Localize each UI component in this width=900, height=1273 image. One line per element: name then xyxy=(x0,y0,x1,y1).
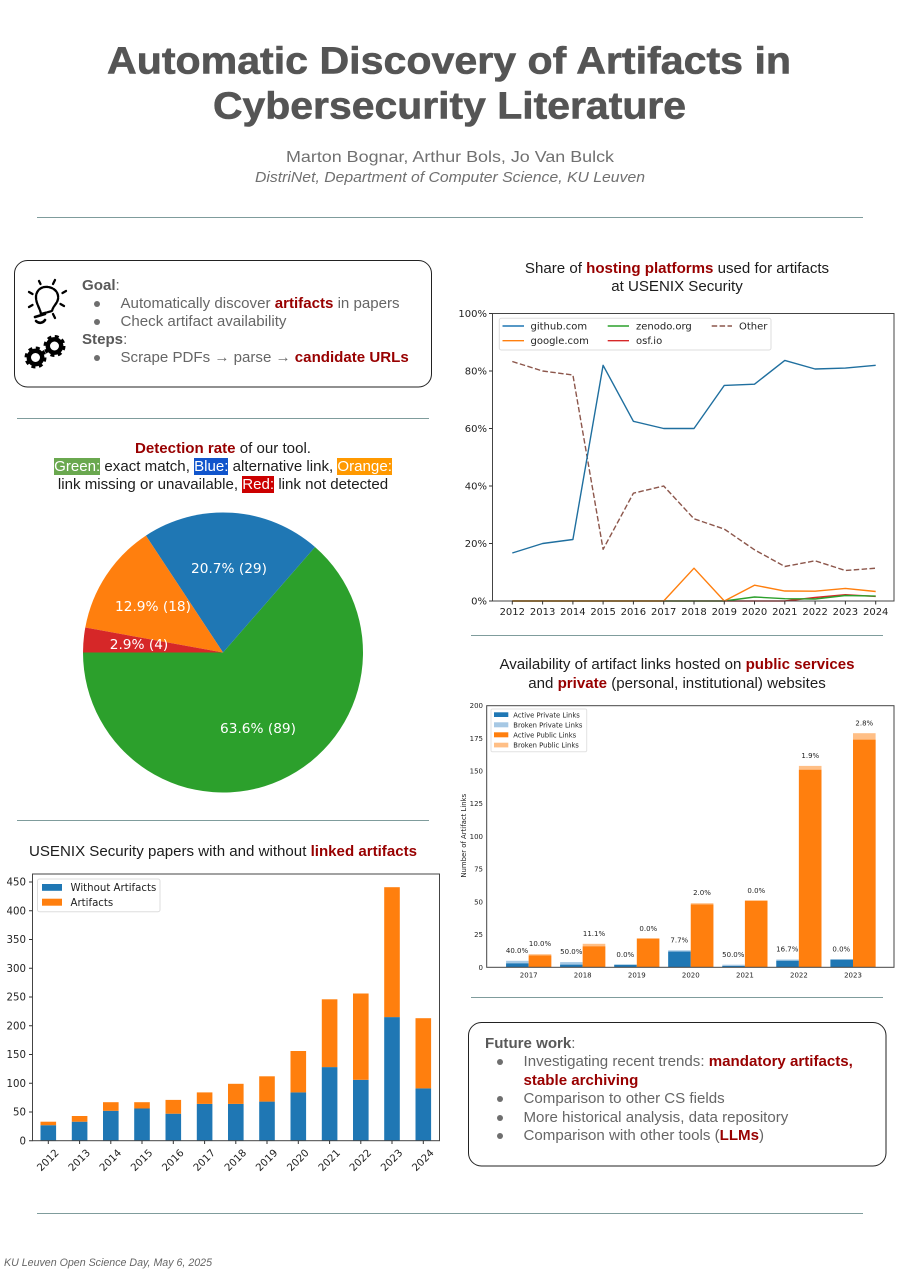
heading: detection rate: link missing or unavailable, Red: link not detected xyxy=(58,476,388,493)
line chart: hosting platforms: 2012 xyxy=(500,607,525,618)
pie chart: detection rate xyxy=(83,512,363,793)
line chart: hosting platforms: 2022 xyxy=(802,607,828,618)
grouped bar chart: availability of artifact links: Broken Public Links xyxy=(513,742,579,750)
title: Cybersecurity Literature xyxy=(213,86,686,128)
stacked bar chart: papers with and without artifacts: 2016 xyxy=(160,1148,187,1174)
grouped bar chart: availability of artifact links: Active Private Links xyxy=(513,712,580,720)
line chart: hosting platforms: 2019 xyxy=(712,607,737,618)
icon: light bulb xyxy=(29,280,66,323)
grouped bar chart: availability of artifact links: 75 xyxy=(474,866,483,874)
stacked bar chart: papers with and without artifacts: 400 xyxy=(7,906,26,917)
grouped bar chart: availability of artifact links: Broken Private Links xyxy=(513,722,583,730)
line chart: hosting platforms: 2015 xyxy=(590,607,616,618)
grouped bar chart: availability of artifact links: 40.0% xyxy=(506,947,528,955)
grouped bar chart: availability of artifact links: 2020 xyxy=(682,972,700,980)
stacked bar chart: papers with and without artifacts: 50 xyxy=(13,1108,26,1119)
text block: future work: Comparison with other tools (LLMs) xyxy=(524,1127,764,1144)
line chart: hosting platforms: 20% xyxy=(465,539,487,550)
grouped bar chart: availability of artifact links: 0.0% xyxy=(832,946,851,954)
text block: goal and steps: Scrape PDFs → parse → candidate URLs xyxy=(120,349,409,366)
stacked bar chart: papers with and without artifacts: 2012 xyxy=(35,1148,62,1174)
affiliation: DistriNet, Department of Computer Science, KU Leuven xyxy=(255,170,645,186)
grouped bar chart: availability of artifact links: 50.0% xyxy=(722,951,745,959)
stacked bar chart: papers with and without artifacts: 2021 xyxy=(317,1148,343,1174)
line chart: hosting platforms: 2024 xyxy=(863,607,888,618)
line chart: hosting platforms: 40% xyxy=(465,482,487,493)
grouped bar chart: availability of artifact links: 150 xyxy=(470,768,483,776)
grouped bar chart: availability of artifact links: 1.9% xyxy=(801,752,820,760)
line chart: hosting platforms: 2023 xyxy=(833,607,858,618)
grouped bar chart: availability of artifact links: 0.0% xyxy=(747,887,766,895)
grouped bar chart: availability of artifact links: 2021 xyxy=(736,972,754,980)
stacked bar chart: papers with and without artifacts: 2014 xyxy=(98,1148,124,1174)
grouped bar chart: availability of artifact links: Active Public Links xyxy=(513,732,577,740)
pie chart: detection rate: 12.9% (18) xyxy=(115,599,191,615)
heading: detection rate xyxy=(54,440,392,493)
grouped bar chart: availability of artifact links: 0.0% xyxy=(616,951,635,959)
grouped bar chart: availability of artifact links: 7.7% xyxy=(670,936,689,944)
grouped bar chart: availability of artifact links: 100 xyxy=(470,833,483,841)
heading: detection rate: Green: exact match, Blue: alternative link, Orange: xyxy=(54,458,392,475)
stacked bar chart: papers with and without artifacts: 2019 xyxy=(254,1148,280,1174)
text block: goal and steps: Check artifact availability xyxy=(120,313,286,330)
stacked bar chart: papers with and without artifacts: 350 xyxy=(7,935,26,946)
grouped bar chart: availability of artifact links: 50 xyxy=(474,898,483,906)
line chart: hosting platforms: 2016 xyxy=(621,607,646,618)
grouped bar chart: availability of artifact links: 2019 xyxy=(628,972,646,980)
footer: KU Leuven Open Science Day, May 6, 2025 xyxy=(4,1257,212,1269)
text block: goal and steps: Goal: xyxy=(82,277,120,294)
heading: detection rate: Detection rate of our tool. xyxy=(135,440,311,457)
line chart: hosting platforms: google.com xyxy=(530,336,589,347)
line chart: hosting platforms: osf.io xyxy=(636,336,662,347)
pie chart: detection rate: 2.9% (4) xyxy=(110,637,168,653)
panel: goal and steps box xyxy=(14,260,432,387)
heading: availability chart: Availability of artifact links hosted on public services xyxy=(499,656,855,673)
stacked bar chart: papers with and without artifacts: Artifacts xyxy=(70,898,113,909)
grouped bar chart: availability of artifact links: 50.0% xyxy=(560,948,583,956)
heading: linked artifacts chart: USENIX Security papers with and without linked artifacts xyxy=(29,843,417,860)
stacked bar chart: papers with and without artifacts: 2015 xyxy=(129,1148,155,1174)
line chart: hosting platforms: 2014 xyxy=(560,607,586,618)
grouped bar chart: availability of artifact links: 2.0% xyxy=(693,889,711,897)
line chart: hosting platforms xyxy=(458,309,894,618)
text block: future work: stable archiving xyxy=(524,1072,638,1089)
line chart: hosting platforms: 80% xyxy=(465,367,487,378)
line chart: hosting platforms: 0% xyxy=(471,597,487,608)
text block: goal and steps xyxy=(82,277,409,366)
stacked bar chart: papers with and without artifacts: Without Artifacts xyxy=(70,883,156,894)
stacked bar chart: papers with and without artifacts: 2023 xyxy=(379,1148,405,1174)
line chart: hosting platforms: zenodo.org xyxy=(636,322,692,332)
line chart: hosting platforms: github.com xyxy=(530,322,587,332)
line chart: hosting platforms: 2017 xyxy=(651,607,676,618)
icon: gears xyxy=(26,336,64,367)
grouped bar chart: availability of artifact links: 0 xyxy=(479,964,483,972)
line chart: hosting platforms: 60% xyxy=(465,424,487,435)
stacked bar chart: papers with and without artifacts: 250 xyxy=(7,993,26,1004)
grouped bar chart: availability of artifact links: 2022 xyxy=(790,972,808,980)
heading: availability chart xyxy=(499,656,855,692)
title xyxy=(107,40,791,128)
heading: hosting platforms chart: at USENIX Security xyxy=(611,278,743,295)
grouped bar chart: availability of artifact links: 0.0% xyxy=(639,925,658,933)
heading: hosting platforms chart xyxy=(525,260,829,295)
grouped bar chart: availability of artifact links: 2.8% xyxy=(855,720,874,728)
stacked bar chart: papers with and without artifacts: 2018 xyxy=(223,1148,249,1174)
stacked bar chart: papers with and without artifacts: 2017 xyxy=(192,1148,218,1174)
stacked bar chart: papers with and without artifacts: 2024 xyxy=(410,1148,437,1174)
grouped bar chart: availability of artifact links xyxy=(460,702,894,980)
line chart: hosting platforms: 2018 xyxy=(681,607,707,618)
grouped bar chart: availability of artifact links: 200 xyxy=(470,702,483,710)
heading: hosting platforms chart: Share of hosting platforms used for artifacts xyxy=(525,260,829,277)
grouped bar chart: availability of artifact links: 175 xyxy=(470,735,483,743)
stacked bar chart: papers with and without artifacts: 150 xyxy=(7,1050,26,1061)
stacked bar chart: papers with and without artifacts: 2022 xyxy=(348,1148,374,1174)
text block: future work: More historical analysis, data repository xyxy=(524,1109,788,1126)
text block: future work: Future work: xyxy=(485,1035,576,1052)
stacked bar chart: papers with and without artifacts: 2020 xyxy=(285,1148,312,1174)
pie chart: detection rate: 63.6% (89) xyxy=(220,721,296,737)
stacked bar chart: papers with and without artifacts xyxy=(7,874,440,1174)
heading: availability chart: and private (personal, institutional) websites xyxy=(528,675,826,692)
grouped bar chart: availability of artifact links: 16.7% xyxy=(776,946,799,954)
line chart: hosting platforms: 2013 xyxy=(530,607,555,618)
text block: future work: Investigating recent trends: mandatory artifacts, xyxy=(524,1053,853,1070)
authors: Marton Bognar, Arthur Bols, Jo Van Bulck xyxy=(286,149,615,166)
text block: goal and steps: Automatically discover artifacts in papers xyxy=(120,295,400,312)
grouped bar chart: availability of artifact links: 25 xyxy=(474,931,483,939)
line chart: hosting platforms: 100% xyxy=(458,309,487,320)
line chart: hosting platforms: Other xyxy=(739,322,768,332)
grouped bar chart: availability of artifact links: 2018 xyxy=(574,972,592,980)
grouped bar chart: availability of artifact links: 2023 xyxy=(844,972,862,980)
grouped bar chart: availability of artifact links: 11.1% xyxy=(583,930,605,938)
stacked bar chart: papers with and without artifacts: 100 xyxy=(7,1079,26,1090)
grouped bar chart: availability of artifact links: 2017 xyxy=(520,972,538,980)
line chart: hosting platforms: 2021 xyxy=(772,607,798,618)
grouped bar chart: availability of artifact links: 125 xyxy=(470,800,483,808)
stacked bar chart: papers with and without artifacts: 450 xyxy=(7,878,26,889)
grouped bar chart: availability of artifact links: Number of Artifact Links xyxy=(460,793,468,878)
grouped bar chart: availability of artifact links: 10.0% xyxy=(529,940,551,948)
text block: future work: Comparison to other CS fields xyxy=(524,1090,725,1107)
stacked bar chart: papers with and without artifacts: 2013 xyxy=(67,1148,93,1174)
pie chart: detection rate: 20.7% (29) xyxy=(191,561,267,577)
title: Automatic Discovery of Artifacts in xyxy=(107,40,791,82)
text block: future work xyxy=(485,1035,853,1144)
stacked bar chart: papers with and without artifacts: 200 xyxy=(7,1021,26,1032)
panel: future work box xyxy=(468,1022,886,1166)
line chart: hosting platforms: 2020 xyxy=(742,607,767,618)
text block: goal and steps: Steps: xyxy=(82,331,127,348)
stacked bar chart: papers with and without artifacts: 300 xyxy=(7,964,26,975)
stacked bar chart: papers with and without artifacts: 0 xyxy=(20,1136,26,1147)
